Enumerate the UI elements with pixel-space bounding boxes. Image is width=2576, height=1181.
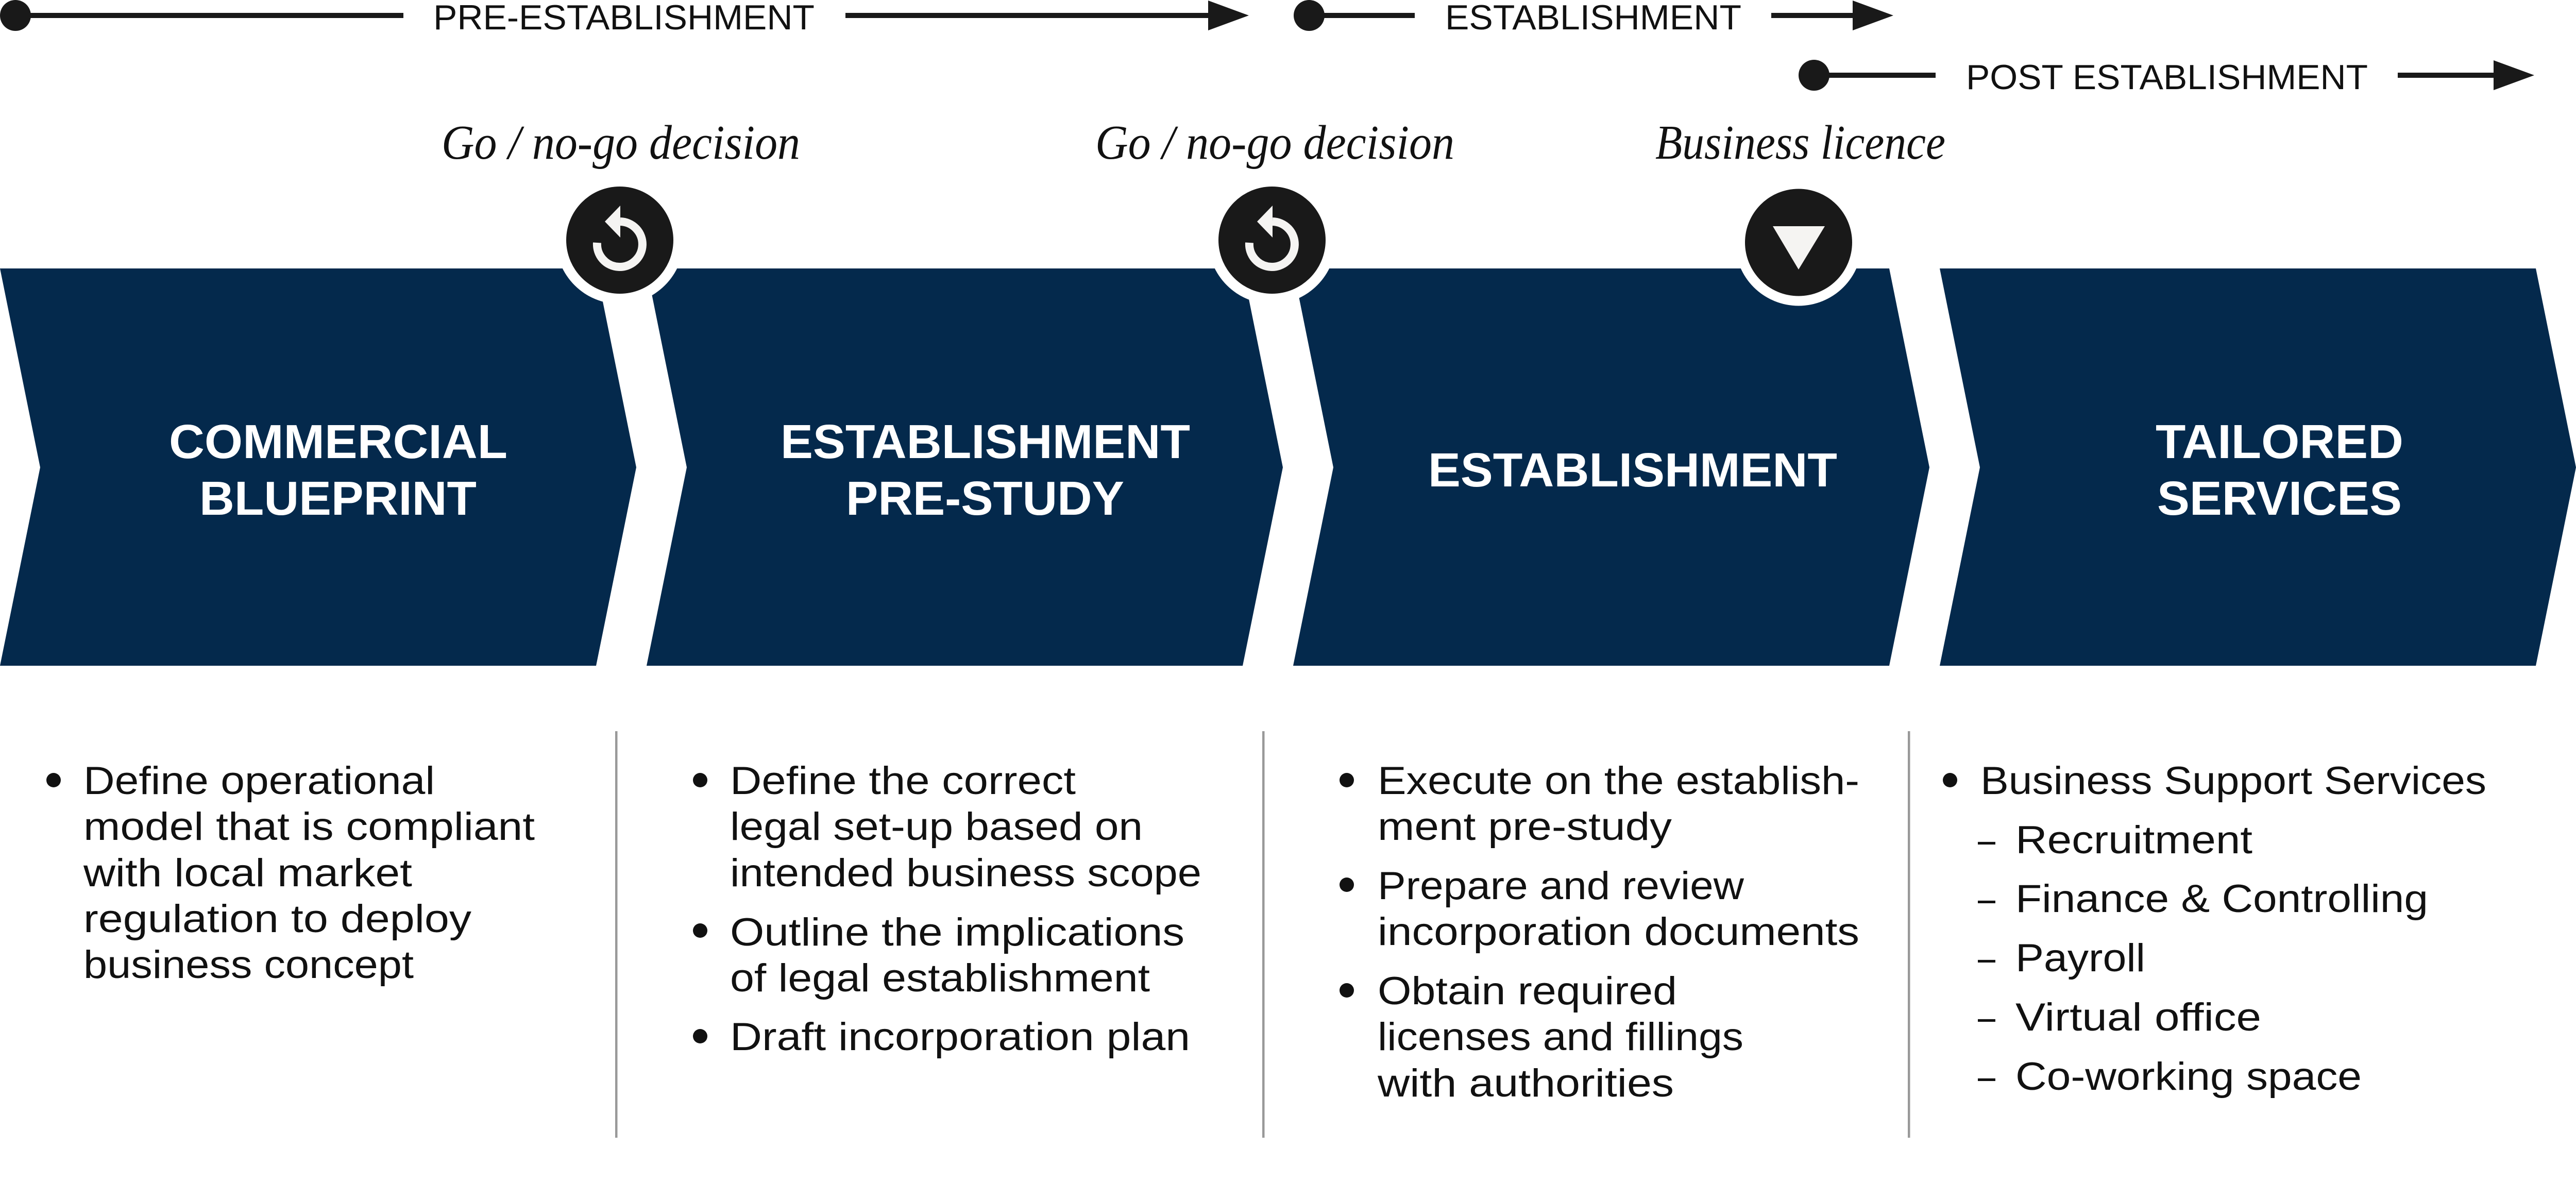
text block: establishment details: ment pre-study bbox=[1378, 805, 1672, 849]
text block: tailored services details: Finance & Controlling bbox=[2015, 877, 2428, 921]
heading: establishment pre-study bbox=[781, 415, 1190, 525]
timeline: establishment bbox=[1294, 0, 1893, 37]
text block: tailored services details: Business Support Services bbox=[1980, 759, 2486, 803]
text block: tailored services details bbox=[1943, 759, 2486, 1099]
text block: tailored services details: Virtual office bbox=[2015, 996, 2261, 1039]
heading: establishment pre-study: PRE-STUDY bbox=[846, 471, 1124, 525]
label: first go / no-go decision: Go / no-go decision bbox=[442, 116, 800, 170]
heading: establishment: ESTABLISHMENT bbox=[1428, 443, 1837, 497]
chevron: establishment bbox=[1293, 268, 1929, 666]
text block: establishment details bbox=[1340, 759, 1859, 1105]
heading: tailored services bbox=[2156, 415, 2403, 525]
timeline: post establishment: POST ESTABLISHMENT bbox=[1966, 58, 2368, 97]
heading: commercial blueprint: COMMERCIAL bbox=[169, 415, 507, 468]
text block: tailored services details: – bbox=[1978, 818, 1996, 862]
timeline: post establishment bbox=[1799, 58, 2534, 97]
text block: commercial blueprint details bbox=[46, 759, 535, 987]
chevron: establishment pre-study bbox=[647, 268, 1283, 666]
text block: commercial blueprint details: model that is compliant bbox=[83, 805, 535, 849]
chevron: commercial blueprint bbox=[0, 268, 636, 666]
text block: establishment pre-study details: Outline the implications bbox=[730, 910, 1184, 954]
text block: establishment pre-study details: Define the correct bbox=[730, 759, 1076, 803]
heading: tailored services: TAILORED bbox=[2156, 415, 2403, 468]
text block: tailored services details: Payroll bbox=[2015, 936, 2145, 980]
text block: establishment pre-study details: of legal establishment bbox=[730, 956, 1150, 1000]
icon: second go / no-go return arrow bbox=[1208, 176, 1336, 304]
heading: commercial blueprint bbox=[169, 415, 507, 525]
text block: establishment pre-study details bbox=[693, 759, 1201, 1059]
text block: commercial blueprint details: business concept bbox=[83, 943, 414, 987]
text block: establishment details: Obtain required bbox=[1378, 969, 1677, 1013]
text block: establishment details: incorporation documents bbox=[1378, 910, 1859, 954]
text block: tailored services details: – bbox=[1978, 936, 1996, 980]
label: business licence: Business licence bbox=[1655, 116, 1945, 170]
text block: tailored services details: Co-working space bbox=[2015, 1055, 2362, 1099]
timeline: pre-establishment bbox=[0, 0, 1249, 37]
text block: establishment details: Prepare and review bbox=[1378, 864, 1744, 908]
text block: commercial blueprint details: with local market bbox=[83, 851, 412, 895]
icon: first go / no-go return arrow bbox=[556, 176, 684, 304]
text block: establishment details: licenses and fillings bbox=[1378, 1015, 1743, 1059]
heading: tailored services: SERVICES bbox=[2157, 471, 2402, 525]
text block: establishment pre-study details: intended business scope bbox=[730, 851, 1201, 895]
text block: establishment details: with authorities bbox=[1377, 1061, 1674, 1105]
label: second go / no-go decision: Go / no-go decision bbox=[1095, 116, 1454, 170]
text block: establishment pre-study details: Draft incorporation plan bbox=[730, 1015, 1190, 1059]
chevron: tailored services bbox=[1940, 268, 2576, 666]
icon: business licence triangle bbox=[1735, 179, 1862, 306]
text block: tailored services details: Recruitment bbox=[2015, 818, 2252, 862]
text block: tailored services details: – bbox=[1978, 996, 1996, 1039]
text block: tailored services details: – bbox=[1978, 1055, 1996, 1099]
text block: commercial blueprint details: Define operational bbox=[83, 759, 435, 803]
heading: commercial blueprint: BLUEPRINT bbox=[199, 471, 477, 525]
heading: establishment pre-study: ESTABLISHMENT bbox=[781, 415, 1190, 468]
text block: establishment details: Execute on the establish- bbox=[1378, 759, 1859, 803]
text block: establishment pre-study details: legal set-up based on bbox=[730, 805, 1143, 849]
text block: tailored services details: – bbox=[1978, 877, 1996, 921]
text block: commercial blueprint details: regulation to deploy bbox=[83, 897, 471, 941]
